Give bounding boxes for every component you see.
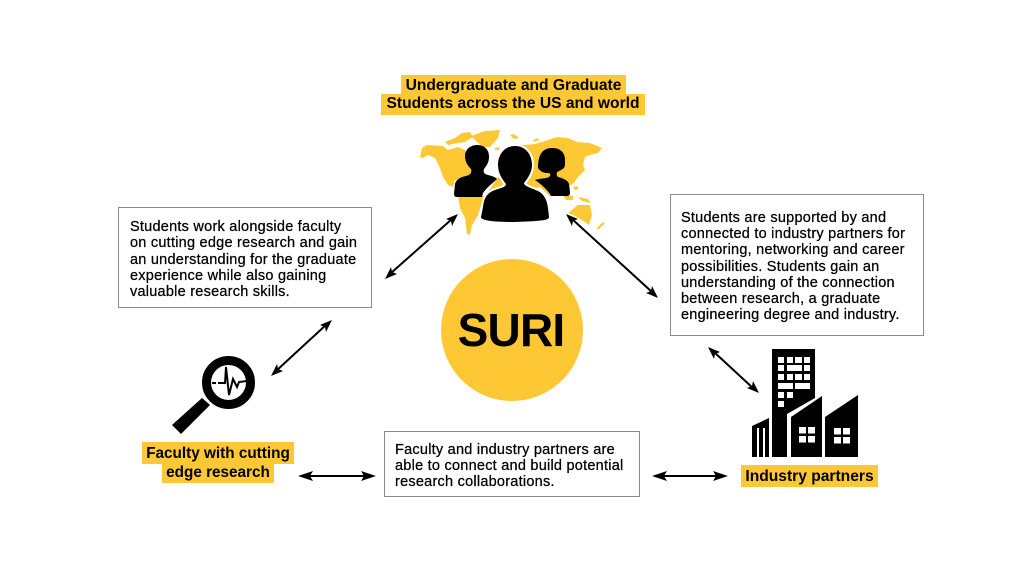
text box: industry and students	[670, 194, 924, 336]
arrow: industry box to building	[708, 347, 759, 393]
label: faculty: Faculty with cutting	[146, 445, 290, 462]
central SURI circle: SURI	[458, 304, 564, 356]
text box: industry and students: mentoring, networking and career	[681, 242, 905, 258]
icon: magnifying glass	[172, 360, 250, 434]
label: industry partners: Industry partners	[745, 468, 874, 485]
icon: industry buildings	[752, 349, 858, 457]
text box: industry and students: understanding of the connection	[681, 275, 895, 291]
text box: faculty and students: experience while also gaining	[130, 268, 326, 284]
heading: students: Undergraduate and Graduate	[406, 77, 621, 94]
text box: faculty and students	[118, 207, 372, 308]
arrow: students to faculty box	[385, 214, 458, 279]
text box: industry and students: possibilities. Students gain an	[681, 259, 879, 275]
text box: industry and students: Students are supported by and	[681, 210, 886, 226]
text box: faculty and industry: Faculty and industry partners are	[395, 442, 615, 458]
icon: world map with students	[420, 130, 605, 235]
central SURI circle	[441, 259, 583, 401]
text box: faculty and students: an understanding for the graduate	[130, 252, 356, 268]
arrow: faculty box to magnifier	[271, 320, 332, 376]
label: faculty	[142, 442, 294, 483]
text box: faculty and industry: able to connect and build potential	[395, 458, 623, 474]
heading: students: Students across the US and world	[386, 95, 640, 112]
text box: faculty and students: Students work alongside faculty	[130, 218, 341, 234]
arrow: students to industry box	[566, 214, 658, 298]
text box: faculty and students: on cutting edge research and gain	[130, 234, 357, 250]
center student	[481, 146, 549, 222]
arrow: collaboration box to industry	[652, 471, 728, 481]
text box: faculty and industry	[384, 431, 640, 497]
label: faculty: edge research	[166, 464, 270, 481]
arrow: faculty to collaboration box	[298, 471, 376, 481]
right student	[535, 148, 570, 196]
text box: faculty and students: valuable research skills.	[130, 284, 290, 300]
left student	[454, 145, 497, 197]
text box: industry and students: between research, a graduate	[681, 291, 880, 307]
text box: industry and students: engineering degree and industry.	[681, 307, 900, 323]
heading: students	[381, 75, 645, 115]
text box: industry and students: connected to industry partners for	[681, 226, 905, 242]
text box: faculty and industry: research collaborations.	[395, 474, 555, 490]
